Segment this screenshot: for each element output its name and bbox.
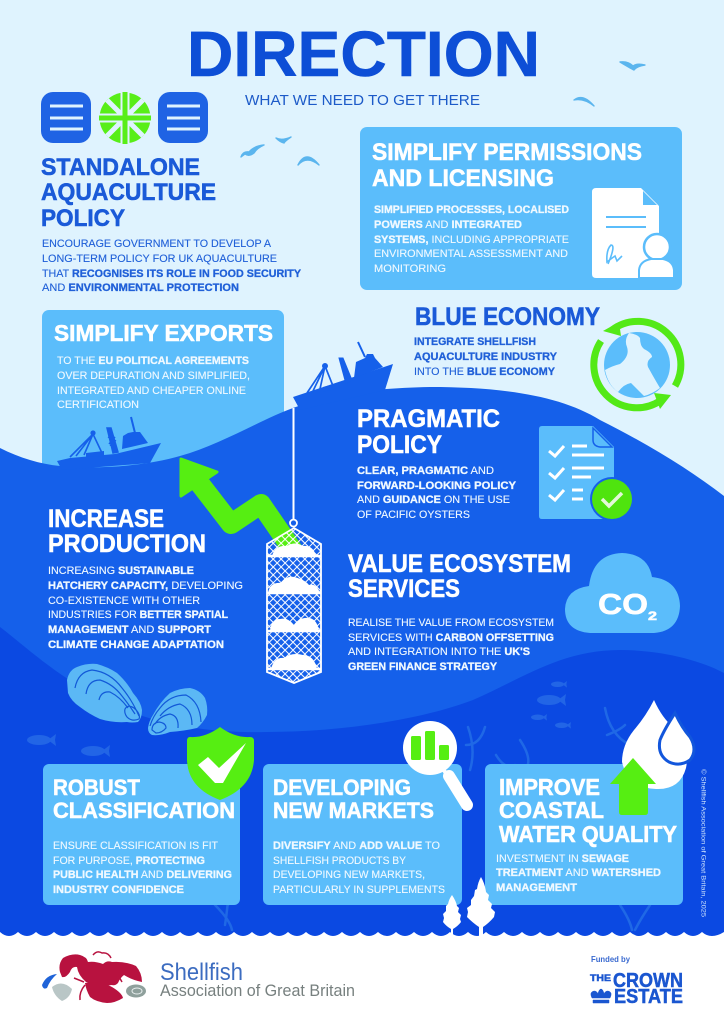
logo wordmark: Shellfish: [160, 959, 243, 986]
icons: seagulls: [241, 62, 645, 165]
body text: INCREASING SUSTAINABLE: [48, 565, 194, 577]
pragmatic policy block: [357, 405, 517, 521]
footer background with scalloped edge: [0, 932, 724, 1024]
copyright: © Shellfish Association of Great Britain, 2025: [700, 769, 708, 917]
value ecosystem services block: [348, 550, 571, 673]
heading: ROBUST: [53, 775, 140, 800]
icon: ship on wave: [293, 342, 393, 410]
heading: NEW MARKETS: [273, 798, 434, 823]
logo: the crown estate: CROWN: [613, 970, 683, 992]
icon: oyster cage on rope: [267, 408, 321, 683]
body text: [348, 617, 554, 673]
body text: MANAGEMENT: [496, 882, 577, 894]
heading: POLICY: [41, 205, 125, 232]
body text: MANAGEMENT AND SUPPORT: [48, 624, 211, 636]
body text: AQUACULTURE INDUSTRY: [414, 351, 558, 363]
icon: checklist: [539, 426, 634, 521]
blue economy block: [414, 303, 600, 378]
heading: [273, 775, 434, 823]
body text: ENVIRONMENTAL ASSESSMENT AND: [374, 248, 568, 260]
heading: AQUACULTURE: [41, 179, 216, 206]
body text: SYSTEMS, INCLUDING APPROPRIATE: [374, 234, 569, 246]
body text: CERTIFICATION: [57, 399, 139, 411]
body text: TO THE EU POLITICAL AGREEMENTS: [57, 355, 249, 367]
body text: MONITORING: [374, 263, 446, 275]
logo: the crown estate: THE: [590, 973, 611, 984]
icon: up arrow: [610, 758, 656, 815]
body text: AND GUIDANCE ON THE USE: [357, 494, 510, 506]
logo: shellfish association lobster: [42, 952, 146, 1003]
icon: large oyster: [67, 664, 142, 722]
heading: PRAGMATIC: [357, 405, 500, 433]
heading: CLASSIFICATION: [53, 798, 235, 823]
icon: magnifier with bar chart: [403, 721, 467, 805]
heading: COASTAL: [499, 797, 604, 823]
body text: CO-EXISTENCE WITH OTHER: [48, 595, 200, 607]
body text: LONG-TERM POLICY FOR UK AQUACULTURE: [42, 253, 277, 265]
body text: CLEAR, PRAGMATIC AND: [357, 465, 494, 477]
heading: STANDALONE: [41, 154, 200, 181]
body text: [414, 336, 558, 378]
body text: POWERS AND INTEGRATED: [374, 219, 522, 231]
heading: [48, 505, 206, 558]
body text: [48, 565, 243, 651]
heading: [499, 774, 677, 847]
wave: deep sea: [0, 627, 724, 940]
heading: VALUE ECOSYSTEM: [348, 550, 571, 578]
heading: WATER QUALITY: [499, 821, 677, 847]
arrow: growth: [181, 459, 294, 552]
body text: ENCOURAGE GOVERNMENT TO DEVELOP A: [42, 238, 272, 250]
icon: CO2 cloud: CO: [598, 589, 648, 621]
body text: INDUSTRY CONFIDENCE: [53, 884, 184, 896]
body text: INTO THE BLUE ECONOMY: [414, 366, 556, 378]
body text: INVESTMENT IN SEWAGE: [496, 853, 629, 865]
body text: TREATMENT AND WATERSHED: [496, 867, 661, 879]
body text: FORWARD-LOOKING POLICY: [357, 480, 517, 492]
body text: THAT RECOGNISES ITS ROLE IN FOOD SECURITY: [42, 268, 302, 280]
body text: PUBLIC HEALTH AND DELIVERING: [53, 869, 232, 881]
body text: GREEN FINANCE STRATEGY: [348, 661, 498, 673]
wave: main sea: [0, 387, 724, 940]
logo wordmark: [160, 959, 355, 1000]
body text: [57, 355, 250, 411]
body text: INDUSTRIES FOR BETTER SPATIAL: [48, 609, 228, 621]
panel: simplify permissions and licensing: [360, 127, 682, 290]
body text: [53, 840, 232, 896]
icon: recycling globe: [594, 321, 681, 409]
increase production block: [48, 505, 243, 651]
panel: developing new markets: [263, 764, 462, 905]
heading: INCREASE: [48, 505, 164, 533]
body text: OF PACIFIC OYSTERS: [357, 509, 470, 521]
body text: SERVICES WITH CARBON OFFSETTING: [348, 632, 554, 644]
heading: SERVICES: [348, 575, 460, 603]
heading: BLUE ECONOMY: [415, 303, 600, 331]
panel: robust classification: [43, 764, 240, 905]
icon: signed document: [592, 188, 674, 278]
panel: simplify exports: [42, 310, 284, 475]
fish shoal: [27, 681, 571, 757]
icon: water drops: [622, 700, 694, 789]
body text: [496, 853, 661, 894]
body text: OVER DEPURATION AND SIMPLIFIED,: [57, 370, 250, 382]
body text: INTEGRATED AND CHEAPER ONLINE: [57, 385, 246, 397]
body text: [42, 238, 302, 294]
body text: AND INTEGRATION INTO THE UK'S: [348, 646, 530, 658]
body text: ENSURE CLASSIFICATION IS FIT: [53, 840, 218, 852]
subtitle: WHAT WE NEED TO GET THERE: [245, 93, 480, 109]
logo: the crown estate: ESTATE: [614, 986, 683, 1008]
funded by label: Funded by: [591, 954, 630, 964]
body text: CLIMATE CHANGE ADAPTATION: [48, 639, 224, 651]
icon: small oyster: [148, 688, 207, 735]
body text: AND ENVIRONMENTAL PROTECTION: [42, 282, 239, 294]
body text: REALISE THE VALUE FROM ECOSYSTEM: [348, 617, 554, 629]
icon: white seaweed: [443, 877, 495, 936]
body text: HATCHERY CAPACITY, DEVELOPING: [48, 580, 243, 592]
icon: shield with tick: [187, 727, 254, 800]
heading: PRODUCTION: [48, 530, 206, 558]
panel: improve coastal water quality: [485, 700, 694, 905]
icon: EU and UK policy documents: [41, 92, 208, 144]
body text: [357, 465, 517, 521]
heading: POLICY: [357, 431, 442, 459]
body text: INTEGRATE SHELLFISH: [414, 336, 536, 348]
heading: AND LICENSING: [372, 165, 554, 192]
icon: CO2 cloud: [565, 553, 680, 633]
logo wordmark: Association of Great Britain: [160, 982, 355, 1000]
title: DIRECTION: [187, 18, 540, 90]
body text: FOR PURPOSE, PROTECTING: [53, 855, 205, 867]
heading: IMPROVE: [499, 774, 600, 800]
heading: [357, 405, 500, 459]
icon: ship in panel: [57, 417, 161, 470]
body text: DIVERSIFY AND ADD VALUE TO: [273, 840, 440, 852]
body text: DEVELOPING NEW MARKETS,: [273, 869, 425, 881]
heading: SIMPLIFY EXPORTS: [54, 320, 273, 346]
icon: CO2 cloud: 2: [648, 609, 657, 623]
heading: DEVELOPING: [273, 775, 411, 800]
panel: standalone aquaculture policy: [41, 92, 302, 294]
heading: [372, 139, 642, 192]
heading: [348, 550, 571, 603]
heading: SIMPLIFY PERMISSIONS: [372, 139, 642, 166]
body text: SHELLFISH PRODUCTS BY: [273, 855, 406, 867]
body text: [374, 204, 569, 275]
body text: [273, 840, 445, 896]
logo: the crown estate: [590, 970, 683, 1008]
body text: PARTICULARLY IN SUPPLEMENTS: [273, 884, 445, 896]
coral background: [215, 708, 650, 930]
body text: SIMPLIFIED PROCESSES, LOCALISED: [374, 204, 569, 216]
heading: [41, 154, 216, 232]
heading: [53, 775, 235, 823]
